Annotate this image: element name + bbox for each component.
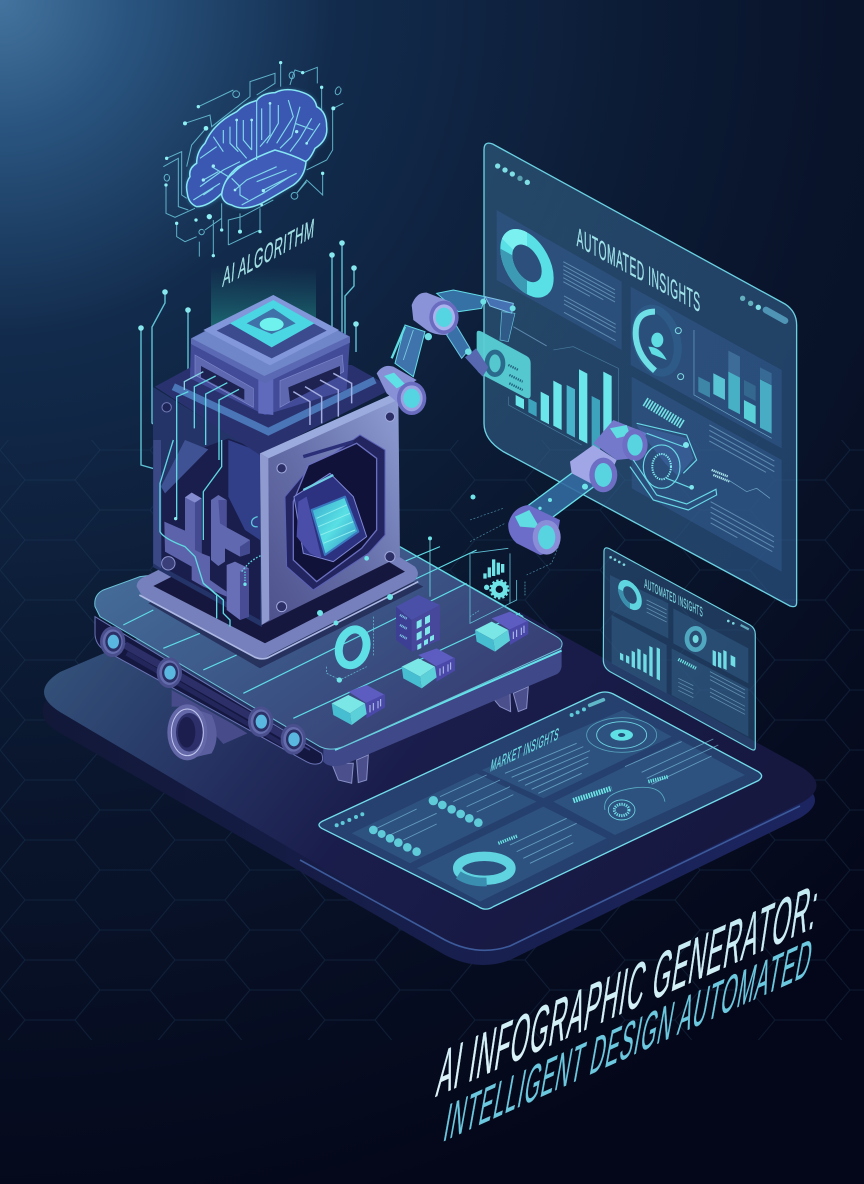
floor panel text lines: [377, 739, 718, 863]
small panel donut: [621, 579, 639, 611]
item: floating donut: [334, 626, 371, 669]
machine screen: [312, 497, 358, 555]
main panel dots: [495, 163, 785, 321]
arm knuckles: [508, 505, 560, 555]
arm base joint: [377, 366, 417, 403]
main panel donut: [506, 228, 548, 299]
conveyor top: [95, 545, 562, 749]
conveyor wheel: [167, 690, 247, 760]
brain body: [187, 90, 327, 208]
arm dashed connectors: [470, 508, 558, 575]
panel: floor dashboard: [319, 692, 762, 909]
machine left body: [153, 387, 273, 627]
main panel bar chart right: [694, 330, 772, 438]
item: hologram chart: [470, 548, 525, 623]
arm elbow: [412, 293, 456, 335]
panel: small floating dashboard: [603, 548, 755, 750]
arm hand wireframe: [637, 425, 693, 477]
arm lower link: [395, 325, 425, 377]
machine base plate: [137, 497, 423, 668]
small panel bar chart: [620, 646, 660, 681]
small panel text lines: [647, 600, 745, 714]
brain circuit traces: [163, 61, 343, 257]
beam glow: [211, 267, 316, 337]
small panel dots: [609, 556, 749, 630]
conveyor legs: [332, 687, 528, 783]
floor panel dots: [335, 707, 586, 856]
conveyor belt: [95, 617, 323, 764]
item: box 1: [332, 685, 385, 725]
robotic arm lower: [470, 420, 717, 575]
arm forearm: [447, 323, 470, 358]
machine connector wires: [177, 372, 239, 460]
circuit lines around machine: [138, 240, 359, 469]
machine: [137, 295, 423, 668]
main panel text lines: [513, 262, 774, 552]
machine body wires: [160, 440, 273, 627]
machine cross pieces: [164, 493, 227, 597]
main panel person gauge: [629, 304, 684, 380]
item: box 3: [475, 612, 528, 652]
floor panel donut: [458, 856, 511, 882]
panel: main dashboard: [484, 143, 797, 607]
panel: floor dashboard: MARKET INSIGHTS: [489, 724, 561, 775]
base platform: [42, 612, 816, 965]
dots on platform: [317, 494, 476, 626]
floor panel radial targets: [587, 718, 665, 820]
item: data cube: [396, 595, 440, 652]
main panel bar chart left: [516, 369, 612, 454]
item: pin line: [428, 536, 432, 597]
conveyor side: [323, 648, 562, 766]
brain: [163, 61, 343, 257]
text: AI ALGORITHM: [221, 213, 316, 294]
panel: small floating dashboard: AUTOMATED INSIGHTS: [644, 575, 703, 620]
arm wrist: [437, 290, 485, 312]
machine front panel: [260, 392, 400, 625]
main panel scribble: [645, 402, 683, 425]
machine connectors: [195, 355, 253, 407]
brain inner traces: [193, 100, 320, 205]
arm card: [477, 331, 531, 398]
small panel mini bars: [713, 650, 735, 670]
conveyor platform: [95, 545, 562, 783]
machine chip lid: [191, 295, 350, 383]
arm bar: [527, 463, 598, 522]
floor panel scribble: [498, 777, 668, 843]
machine window: [285, 435, 385, 590]
conveyor items: [327, 536, 528, 725]
small panel gauge: [687, 628, 704, 650]
item: box 2: [402, 648, 455, 688]
conveyor rollers: [100, 626, 306, 755]
machine deck and neck: [155, 295, 393, 460]
robotic arm upper: [377, 290, 531, 415]
